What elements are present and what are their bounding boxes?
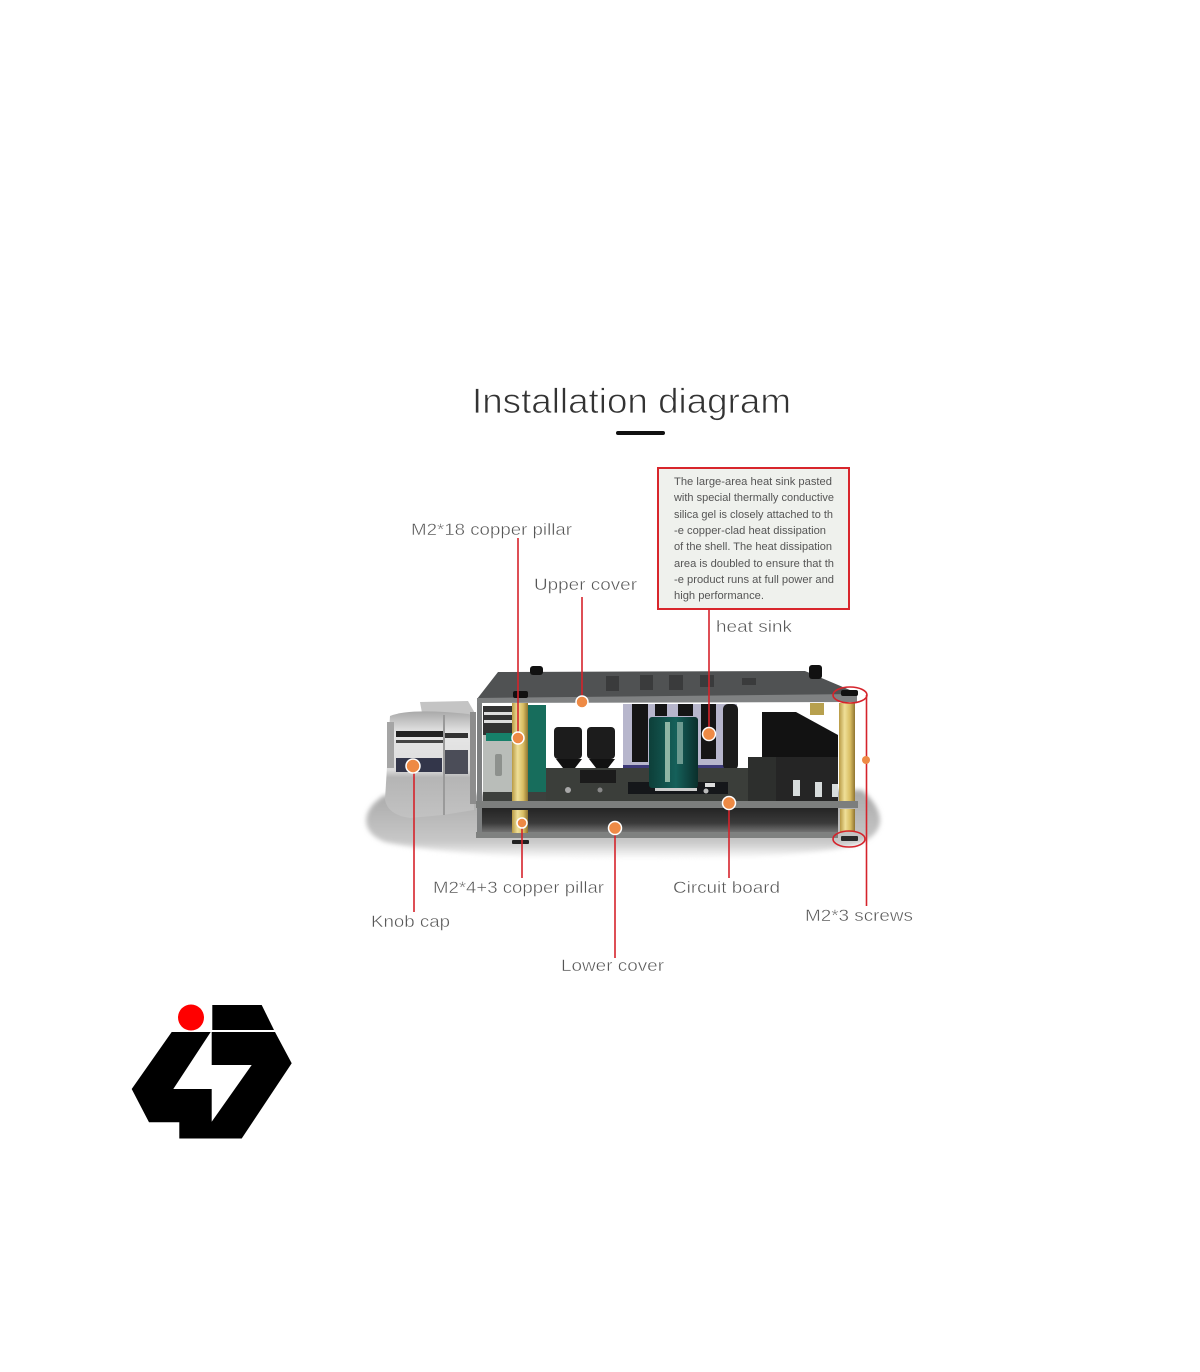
leader: knob cap <box>406 759 420 912</box>
label: upper cover: Upper cover <box>534 575 637 594</box>
knob cap <box>385 701 476 818</box>
callout: heat sink description <box>658 468 849 609</box>
label: M2*18 copper pillar: M2*18 copper pillar <box>411 520 572 539</box>
callout: heat sink description: -e copper-clad heat dissipation <box>674 525 826 537</box>
label: knob cap: Knob cap <box>371 912 450 931</box>
transformer and connector <box>748 703 838 801</box>
callout: heat sink description: silica gel is closely attached to th <box>674 509 833 521</box>
circuit board edge <box>476 801 858 808</box>
left side wall <box>477 703 482 835</box>
callout: heat sink description: high performance. <box>674 590 764 602</box>
callout: heat sink description: of the shell. The heat dissipation <box>674 541 832 553</box>
callout: heat sink description: The large-area heat sink pasted <box>674 476 832 488</box>
green electrolytic capacitor <box>649 717 698 788</box>
leader: M2*18 copper pillar <box>512 538 524 744</box>
callout: heat sink description: with special thermally conductive <box>673 492 834 504</box>
black capacitors <box>554 727 615 768</box>
lower cover <box>476 808 858 844</box>
upper cover <box>477 665 858 703</box>
label: circuit board: Circuit board <box>673 878 780 897</box>
leader: M2*4+3 copper pillar <box>517 818 527 878</box>
circuit board components <box>546 768 780 801</box>
label: heat sink: heat sink <box>716 617 793 636</box>
leader: upper cover <box>576 597 588 708</box>
title underline <box>616 431 665 435</box>
left module and green board <box>483 705 546 801</box>
drop shadow <box>366 790 880 859</box>
callout: heat sink description: area is doubled to ensure that th <box>674 558 834 570</box>
leader: M2*3 screws with highlight rings <box>833 687 870 906</box>
product cutaway illustration <box>366 665 880 859</box>
title: Installation diagram <box>472 382 791 421</box>
label: M2*4+3 copper pillar: M2*4+3 copper pillar <box>433 878 604 897</box>
label: M2*3 screws: M2*3 screws <box>805 906 913 925</box>
brass pillars <box>512 703 855 833</box>
leader: circuit board <box>722 796 736 878</box>
leader: heat sink <box>702 609 716 740</box>
callout: heat sink description: -e product runs at full power and <box>674 574 834 586</box>
leader: lower cover <box>608 822 622 958</box>
label: lower cover: Lower cover <box>561 956 664 975</box>
icon: brand logo <box>132 1004 292 1138</box>
heat sink <box>623 704 738 772</box>
